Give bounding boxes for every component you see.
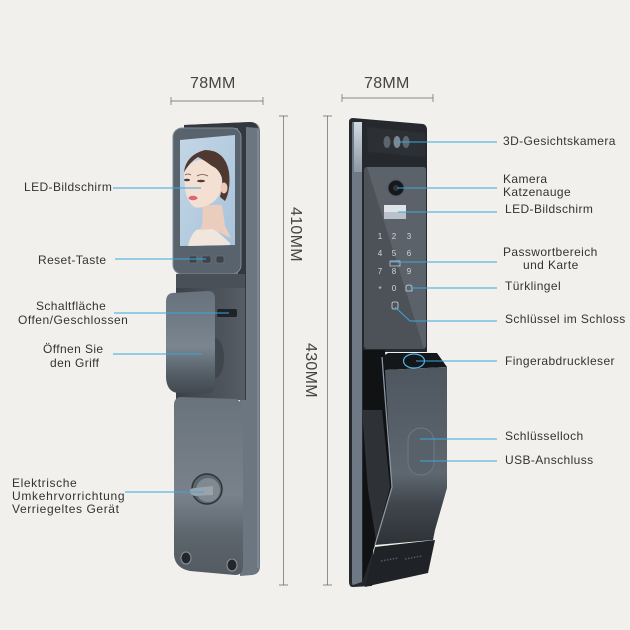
reset buttons xyxy=(189,256,224,263)
panel glare xyxy=(367,167,426,349)
label: Schaltfläche Offen/Geschlossen: Offen/Geschlossen xyxy=(18,313,128,327)
keypad glyphs: 2 xyxy=(392,232,397,241)
neck under screen xyxy=(176,274,245,288)
dimension: left width 78MM xyxy=(171,75,263,105)
label: USB-Anschluss: USB-Anschluss xyxy=(505,453,594,467)
display with portrait xyxy=(180,135,235,246)
label: 3D-Gesichtskamera: 3D-Gesichtskamera xyxy=(503,134,616,148)
label: Schaltfläche Offen/Geschlossen: Schaltfläche xyxy=(36,299,106,313)
mid plate between screen and lower plate xyxy=(176,288,245,400)
portrait face xyxy=(184,160,222,208)
keypad glyphs: 3 xyxy=(407,232,412,241)
body xyxy=(349,118,427,587)
label: Kamera Katzenauge: Kamera xyxy=(503,172,547,186)
keypad glyphs: 8 xyxy=(392,267,397,276)
label: LED-Bildschirm left: LED-Bildschirm xyxy=(24,180,112,194)
front panel xyxy=(364,167,426,349)
plate highlight edge xyxy=(257,130,259,568)
lock back view xyxy=(349,118,447,587)
dimension: height 430MM: 430MM xyxy=(302,343,319,398)
handle side edge highlight xyxy=(375,357,392,545)
lower plate xyxy=(174,397,243,575)
keypad glyphs: 6 xyxy=(407,249,412,258)
camera block xyxy=(367,127,425,157)
handle top with fingerprint reader xyxy=(382,353,447,370)
dimension: height 430MM xyxy=(302,116,332,585)
lock front view xyxy=(166,122,260,576)
keypad glyphs: 5 xyxy=(392,249,397,258)
label: Reset-Taste: Reset-Taste xyxy=(38,253,106,267)
fingerprint ring xyxy=(404,354,424,368)
label: Elektrische Umkehrvorrichtung xyxy=(12,476,204,516)
handle body xyxy=(375,367,447,545)
silver side strip xyxy=(352,122,362,585)
keypad glyphs: 7 xyxy=(378,267,383,276)
thumb turn knob xyxy=(190,474,222,504)
handle grip xyxy=(166,291,215,393)
lock icon xyxy=(392,302,398,309)
keypad glyphs: 0 xyxy=(392,284,397,293)
keypad glyphs: 4 xyxy=(378,249,383,258)
label: Schaltfläche Offen/Geschlossen xyxy=(18,299,229,327)
dimension: right width 78MM xyxy=(342,75,433,102)
handle base xyxy=(365,540,435,587)
dimension: height 410MM: 410MM xyxy=(287,207,304,262)
keypad glyphs xyxy=(378,232,412,294)
screws xyxy=(181,552,237,571)
recess behind handle xyxy=(363,350,392,580)
label: Elektrische Umkehrvorrichtung: Elektrische xyxy=(12,476,77,490)
keyhole cover xyxy=(408,428,434,475)
dimension: right width 78MM: 78MM xyxy=(364,75,410,92)
card area icon xyxy=(390,261,400,266)
label: Elektrische Umkehrvorrichtung: Umkehrvorrichtung xyxy=(12,489,125,503)
portrait neck xyxy=(200,205,231,238)
label: Fingerabdruckleser: Fingerabdruckleser xyxy=(505,354,615,368)
label: Passwortbereich und Karte: und Karte xyxy=(523,258,579,272)
keypad glyphs: * xyxy=(378,285,382,294)
label: Türklingel: Türklingel xyxy=(505,279,561,293)
peephole camera xyxy=(388,180,404,196)
keypad glyphs: 1 xyxy=(378,232,383,241)
dimension: left width 78MM: 78MM xyxy=(190,75,236,92)
label: Schlüssel im Schloss: Schlüssel im Schloss xyxy=(505,312,626,326)
label: Öffnen Sie den Griff: Öffnen Sie xyxy=(43,342,103,356)
label: Schlüsselloch: Schlüsselloch xyxy=(505,429,584,443)
label: LED-Bildschirm right: LED-Bildschirm xyxy=(505,202,593,216)
status slot xyxy=(217,309,237,317)
dimension: height 410MM xyxy=(279,116,304,585)
back plate strip xyxy=(184,122,260,576)
label: Kamera Katzenauge: Katzenauge xyxy=(503,185,571,199)
portrait shoulder xyxy=(188,227,230,246)
label: Passwortbereich und Karte xyxy=(390,245,598,272)
label: Kamera Katzenauge xyxy=(397,172,571,199)
label: Öffnen Sie den Griff: den Griff xyxy=(50,356,100,370)
label: Passwortbereich und Karte: Passwortbereich xyxy=(503,245,598,259)
OLED display xyxy=(384,205,406,219)
label: Schlüssel im Schloss xyxy=(395,307,626,326)
handle pivot xyxy=(206,338,224,378)
screen housing xyxy=(173,128,241,274)
label: Elektrische Umkehrvorrichtung: Verriegeltes Gerät xyxy=(12,502,120,516)
dark rim at top and inner channel xyxy=(184,122,258,400)
portrait hair xyxy=(184,150,230,201)
keypad glyphs: 9 xyxy=(407,267,412,276)
label: Öffnen Sie den Griff xyxy=(43,342,202,370)
